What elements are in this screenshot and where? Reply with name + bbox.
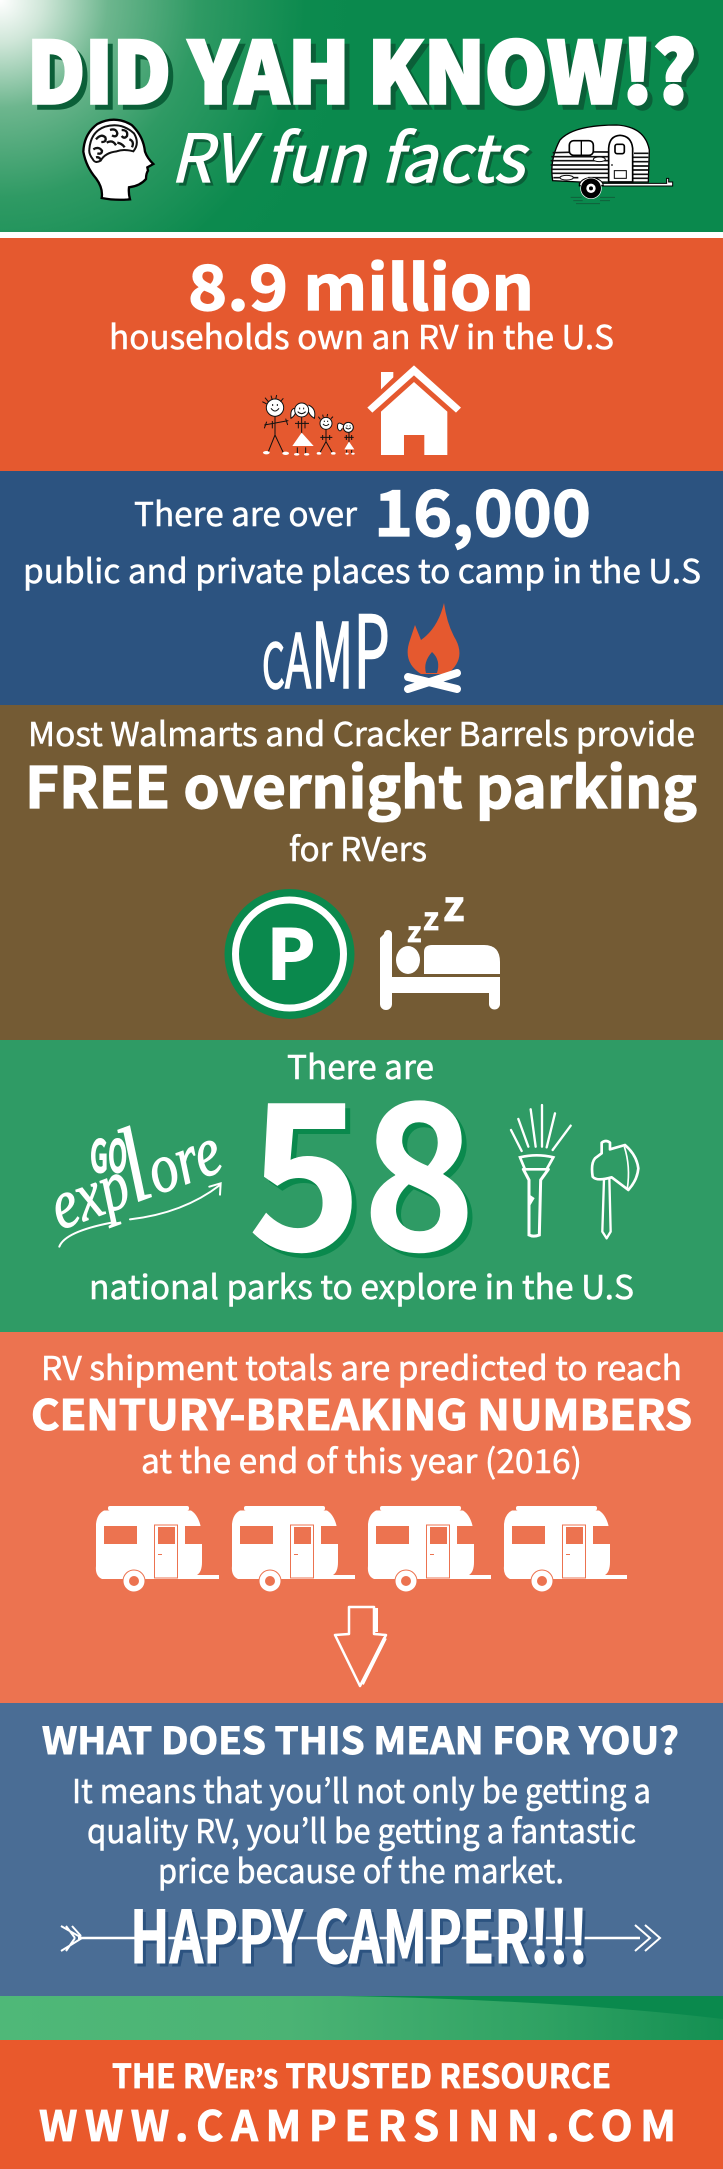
text: national parks: national parks to explore in the U.S bbox=[89, 1261, 634, 1309]
text: body line 3: price because of the market. bbox=[158, 1845, 564, 1893]
panel: shipments bbox=[0, 1332, 723, 1703]
stat: 58: 58 bbox=[248, 1016, 476, 1309]
icon: flashlight bbox=[511, 1105, 571, 1236]
panel: footer bbox=[0, 2040, 723, 2169]
text: most walmarts: Most Walmarts and Cracker Barrels provide bbox=[28, 708, 695, 756]
icon: go explore lettering: GO bbox=[90, 1121, 127, 1186]
heading: what does this mean: WHAT DOES THIS MEAN FOR YOU? bbox=[42, 1711, 679, 1765]
icon: parking sign: P bbox=[267, 900, 315, 999]
panel: campgrounds bbox=[0, 464, 723, 717]
title shadow: DID YAH KNOW!? bbox=[32, 12, 701, 133]
icon: bed: z bbox=[443, 873, 464, 934]
panel: national parks bbox=[0, 1016, 723, 1332]
panel: what does this mean bbox=[0, 1703, 723, 1996]
icon: trailer 1 bbox=[96, 1506, 219, 1592]
band: green swoosh bbox=[0, 1996, 723, 2040]
icon: stick-figure family bbox=[262, 395, 355, 456]
text: body line 1: It means that you’ll not only be getting a bbox=[72, 1765, 651, 1813]
arrow: through happy camper bbox=[61, 1925, 660, 1951]
stat: 16,000: 16,000 bbox=[374, 464, 591, 555]
text: there are: There are bbox=[287, 1041, 434, 1089]
icon: campfire bbox=[408, 603, 459, 689]
panel: households bbox=[0, 238, 723, 471]
divider: white strip bbox=[0, 232, 723, 238]
icon: go explore lettering: explore bbox=[28, 1081, 234, 1253]
text: body line 2: quality RV, you’ll be getting a fantastic bbox=[87, 1805, 636, 1853]
url: WWW.CAMPERSINN.COM bbox=[39, 2093, 676, 2154]
text: public and private places: public and private places to camp in the U.S bbox=[23, 545, 701, 593]
icon: head with brain bbox=[83, 120, 153, 200]
text: for rvers: for RVers bbox=[289, 823, 427, 871]
text: rv shipment totals: RV shipment totals are predicted to reach bbox=[41, 1342, 682, 1390]
icon: trailer 2 bbox=[232, 1506, 355, 1592]
icon: vintage trailer bbox=[551, 125, 673, 204]
stat shadow: 58: 58 bbox=[253, 1021, 481, 1314]
icon: bed: z bbox=[407, 911, 421, 951]
arrow: down bbox=[335, 1607, 386, 1686]
subtitle: RV fun facts bbox=[170, 106, 529, 202]
heading: century-breaking numbers: CENTURY-BREAKING NUMBERS bbox=[31, 1382, 692, 1443]
panel: free overnight parking bbox=[0, 705, 723, 1040]
subtitle shadow: RV fun facts bbox=[173, 109, 532, 205]
icon: parking sign bbox=[224, 889, 354, 1019]
icon: trailer 3 bbox=[368, 1506, 491, 1592]
icon: trailer 4 bbox=[504, 1506, 627, 1592]
tagline: THE RVER’S TRUSTED RESOURCE bbox=[112, 2050, 611, 2098]
panel: header bbox=[0, 0, 723, 232]
stat: 8.9 million: 8.9 million bbox=[188, 238, 534, 328]
icon: bed bbox=[380, 873, 500, 1010]
heading: free overnight parking: FREE overnight parking bbox=[25, 743, 697, 825]
icon label: camp: CAMP bbox=[262, 572, 390, 717]
text: there are over: There are over bbox=[134, 488, 357, 536]
text: households own an RV: households own an RV in the U.S bbox=[109, 311, 614, 359]
title: DID YAH KNOW!? bbox=[27, 7, 696, 128]
icon: bed: z bbox=[423, 894, 439, 939]
text: at the end of this year: at the end of this year (2016) bbox=[141, 1435, 582, 1483]
icon: axe bbox=[592, 1141, 638, 1238]
icon: house bbox=[367, 365, 461, 455]
